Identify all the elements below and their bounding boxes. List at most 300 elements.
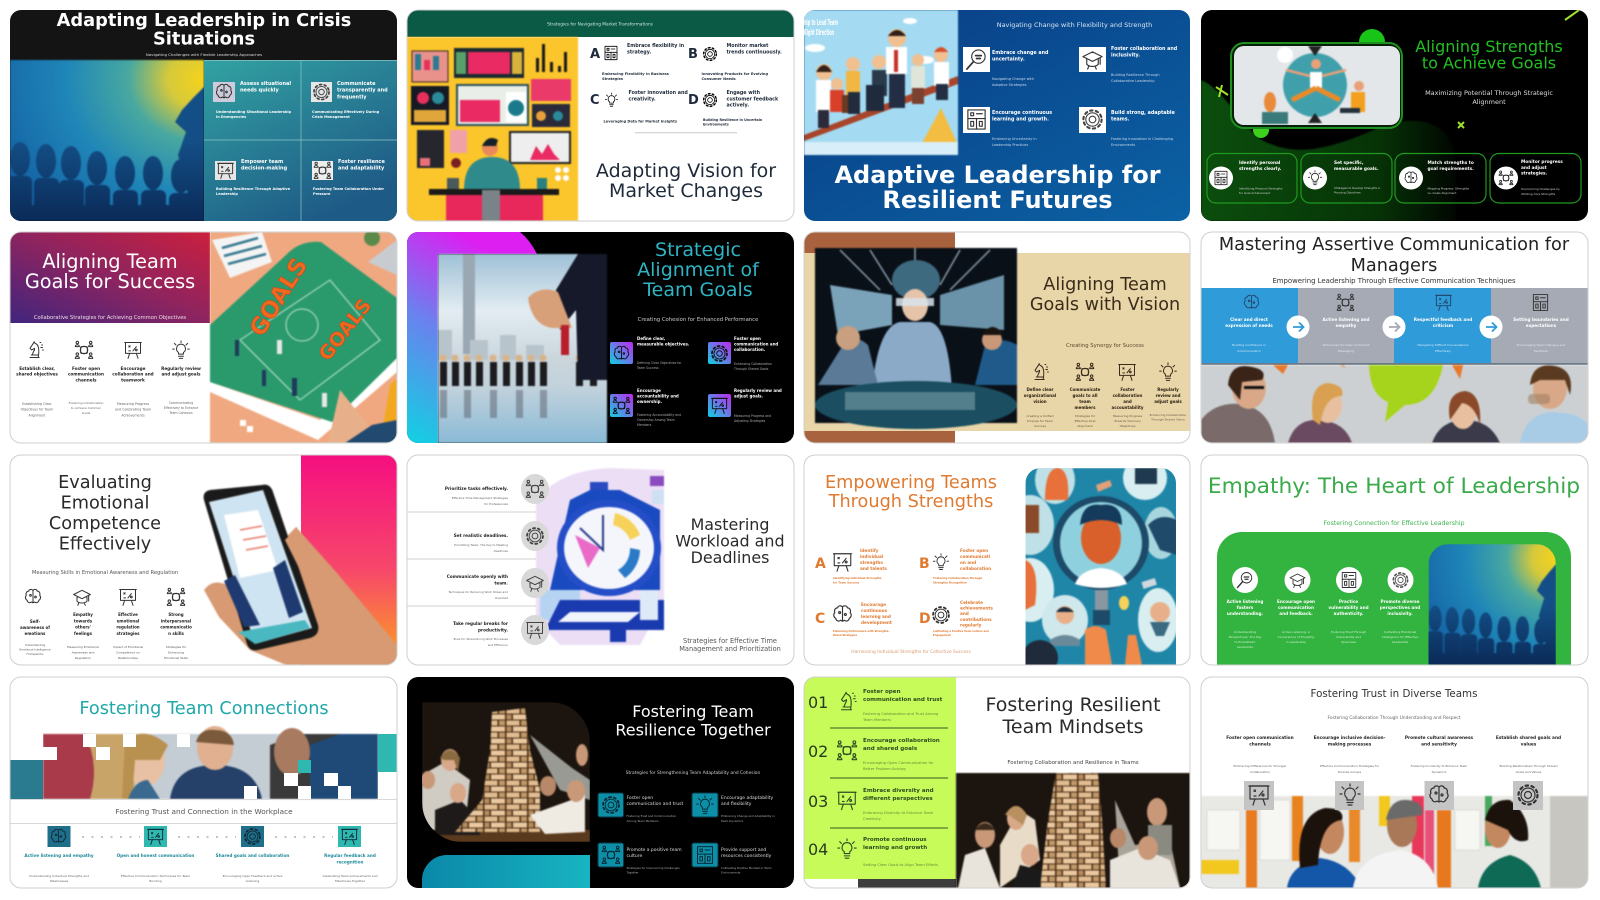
item: regulation: Impact of Emotional xyxy=(113,645,143,649)
item: review goals: Effectively to Enhance xyxy=(164,406,198,410)
item B: communicati xyxy=(960,554,991,559)
subtitle: Navigating Change with Flexibility and Strength xyxy=(997,21,1152,29)
title: Fostering Resilient xyxy=(985,694,1161,716)
row 4 xyxy=(452,615,549,647)
box: match strengths: Match strengths to xyxy=(1428,161,1474,166)
title: Adaptive Leadership for xyxy=(834,161,1161,189)
item: communicate: Alignment xyxy=(1077,424,1094,428)
item: vision: Creating a Unified xyxy=(1026,414,1054,418)
title: Emotional xyxy=(61,494,149,514)
column: cultural awareness xyxy=(1405,735,1474,774)
item: communicate: team xyxy=(1079,399,1091,404)
item: define objectives: Team Success xyxy=(636,366,659,370)
beige and brown backdrop xyxy=(804,232,1190,443)
item: collaboration: Achievements xyxy=(121,413,145,417)
step 01: Team Members xyxy=(862,718,891,722)
subtitle: Navigating Challenges with Flexible Leadership Approaches xyxy=(146,52,262,57)
title: Evaluating xyxy=(58,473,152,493)
item C: creativity. xyxy=(628,96,656,102)
item: active listening: understanding. xyxy=(1227,611,1263,616)
item: vulnerability: vulnerability and xyxy=(1328,605,1369,610)
item: accountability: Encourage xyxy=(637,388,661,393)
item: foster resilience: Pressure xyxy=(313,192,331,196)
item: embrace change: uncertainty. xyxy=(992,57,1025,63)
item: embrace change xyxy=(963,47,1049,87)
item: define objectives xyxy=(610,336,690,370)
item: clear objectives: shared objectives xyxy=(16,372,58,377)
item: empathy: Regulation xyxy=(75,656,91,660)
column: inclusive decisions: making processes xyxy=(1328,742,1372,748)
item: communication: Foster open xyxy=(72,366,100,371)
item: accountability: accountability and xyxy=(637,394,679,398)
item: empower team: decision-making xyxy=(241,166,288,172)
step 02: Encouraging Open Communication for xyxy=(863,761,934,765)
item: vision xyxy=(1024,364,1057,428)
dashboard illustration xyxy=(407,37,578,221)
segment: active listening: Messaging xyxy=(1338,349,1354,353)
footer caption: Harnessing Individual Strengths for Collective Success xyxy=(851,649,971,655)
gradient title panel xyxy=(10,232,210,323)
subtitle: Maximizing Potential Through Strategic xyxy=(1425,89,1553,97)
item A: strategy. xyxy=(627,49,651,55)
item B: Innovating Products for Evolving xyxy=(702,72,768,76)
item: empathy: Measuring Emotional xyxy=(67,645,99,649)
box: identify strengths: Identify personal xyxy=(1239,161,1280,166)
step 02: Encourage collaboration xyxy=(863,738,940,744)
item: define objectives: Define clear, xyxy=(637,336,665,341)
item: communicate: Communicating Effectively During xyxy=(312,110,379,114)
item: embrace change: Embrace change and xyxy=(992,51,1048,56)
item: open communication: communication xyxy=(1278,605,1314,610)
box: set goals: Strategies to Develop Strengths in xyxy=(1334,186,1380,190)
item D: regularly xyxy=(960,622,982,627)
step: shared goals: Listening xyxy=(246,879,259,883)
item: interpersonal: Enhancing xyxy=(168,650,184,654)
box: monitor progress: Monitor progress xyxy=(1521,160,1563,165)
subtitle: Management and Prioritization xyxy=(679,645,781,653)
photo strip with pixel squares xyxy=(10,726,397,799)
title: Empowering Teams xyxy=(825,473,997,493)
box: match strengths xyxy=(1395,154,1486,203)
box: identify strengths: Identifying Personal Strengths xyxy=(1239,186,1283,190)
item: communication: channels xyxy=(75,377,97,382)
card: Mastering Assertive Communication for Managers xyxy=(1201,232,1588,443)
gradient ribbon xyxy=(407,232,537,443)
box: monitor progress: Utilizing Core Strengths xyxy=(1521,192,1556,196)
item: open communication: communication and trust xyxy=(626,801,683,807)
title: Team Goals xyxy=(642,279,753,301)
photo: jenga tower xyxy=(421,702,590,842)
title: Managers xyxy=(1351,256,1437,276)
phone in hand xyxy=(204,485,397,665)
item: regulation xyxy=(113,590,143,660)
item: accountability: collaboration xyxy=(1113,393,1143,398)
step 01: Foster open xyxy=(863,689,901,695)
item D xyxy=(688,90,779,127)
item: review: Through Shared Vision xyxy=(1150,418,1185,422)
grey icon tiles xyxy=(1244,781,1543,810)
item: accountability: ownership. xyxy=(637,399,662,404)
item C: Encourage xyxy=(861,602,886,607)
item A: A xyxy=(590,47,600,62)
item: clear objectives: Objectives for Team xyxy=(21,408,53,412)
item: foster collaboration: Foster collaboration and xyxy=(1111,47,1177,52)
column: communication channels: channels xyxy=(1249,742,1271,748)
photo: jenga tower team xyxy=(956,773,1190,888)
item: regulation: emotional xyxy=(117,618,140,623)
segment: boundaries: expectations xyxy=(1526,323,1557,328)
subtitle: Fostering Trust and Connection in the Workplace xyxy=(115,807,293,816)
item: define objectives: measurable objectives. xyxy=(637,342,690,346)
item D: Building Resilience in Uncertain xyxy=(703,118,762,122)
illustration: magnifier and faces xyxy=(1006,456,1178,676)
card: Aligning Team Goals for Success xyxy=(10,230,397,443)
subtitle: Strategies for Effective Time xyxy=(683,637,777,645)
item: adaptable teams: Build strong, adaptable xyxy=(1111,111,1175,116)
accent marks xyxy=(1216,10,1579,128)
item: foster resilience xyxy=(312,159,386,196)
column: inclusive decisions xyxy=(1314,735,1386,774)
item: accountability: Towards Visionary xyxy=(1113,419,1141,423)
step 03: 03 xyxy=(808,792,828,811)
item D: D xyxy=(688,93,699,108)
item: embrace change: Adaptive Strategies xyxy=(992,83,1027,87)
item: adaptability: Encourage adaptability xyxy=(721,796,773,801)
title: Mastering Assertive Communication for xyxy=(1219,235,1569,255)
title: Fostering Team xyxy=(632,702,754,721)
silhouette image xyxy=(1427,544,1556,665)
arrow 1 xyxy=(1286,316,1310,338)
title: Goals with Vision xyxy=(1030,295,1180,315)
item D: Engagement xyxy=(933,633,952,637)
item: foster collaboration: inclusivity. xyxy=(1111,53,1140,59)
green panel xyxy=(1217,532,1571,665)
item: communicate: Strategies for xyxy=(1075,414,1095,418)
row 2: Deadlines xyxy=(494,549,508,553)
item: adaptability xyxy=(692,793,775,823)
item: diverse perspectives: inclusivity. xyxy=(1387,611,1413,616)
item: review goals xyxy=(161,341,201,415)
box: identify strengths: for Goal Achievement xyxy=(1239,191,1271,195)
item A: A xyxy=(815,556,826,572)
column: inclusive decisions: Encourage inclusive decision- xyxy=(1314,736,1385,741)
photo: hand placing red figure xyxy=(438,254,607,443)
item: continuous learning: Embracing Uncertainty in xyxy=(992,137,1037,141)
item: communication: to Achieve Common xyxy=(71,406,101,410)
title: Strategic xyxy=(655,239,741,261)
item: foster resilience: and adaptability xyxy=(338,166,385,172)
title: Adapting Vision for xyxy=(596,160,776,182)
item: vision: organizational xyxy=(1024,393,1057,398)
subtitle: Fostering Connection for Effective Leadership xyxy=(1323,520,1465,527)
item: diverse perspectives: perspectives and xyxy=(1380,605,1420,610)
subtitle: Alignment xyxy=(1472,98,1506,106)
item: review xyxy=(1150,363,1186,422)
card: Fostering Team Resilience Together xyxy=(407,677,794,888)
segment: active listening: empathy xyxy=(1336,323,1357,328)
item: accountability: Objectives xyxy=(1120,424,1136,428)
row 3: Techniques for Reducing Work Stress and xyxy=(448,590,508,594)
box: identify strengths: strengths clearly. xyxy=(1239,166,1282,172)
title: Aligning Strengths xyxy=(1415,37,1563,56)
item: vulnerability: authenticity. xyxy=(1334,611,1364,616)
item C: continuous xyxy=(861,608,888,613)
subtitle: Fostering Collaboration and Resilience in Teams xyxy=(1007,760,1139,766)
item: review: Enhancing Collaboration xyxy=(1150,413,1186,417)
item: interpersonal: n skills xyxy=(168,631,185,636)
item: empathy: towards xyxy=(74,618,93,623)
item: active listening: fosters xyxy=(1237,605,1254,610)
step 01 xyxy=(808,689,943,722)
item: communicate: Effective Goal xyxy=(1075,419,1096,423)
item: adaptable teams: Fostering Innovation in Challenging xyxy=(1111,137,1173,141)
item: clear objectives xyxy=(16,342,58,417)
segment: boundaries xyxy=(1513,295,1569,353)
item D: actively. xyxy=(726,103,749,109)
goals field illustration xyxy=(210,230,397,443)
item: accountability: Fostering Accountability and xyxy=(637,413,681,417)
item C: C xyxy=(815,611,825,627)
item: diverse perspectives xyxy=(1380,567,1420,644)
item: interpersonal: interpersonal xyxy=(161,618,192,623)
step: regular feedback xyxy=(322,826,378,883)
item: vulnerability xyxy=(1328,567,1369,644)
item: open communication: Enhancing Collaboration xyxy=(734,362,772,366)
item: open communication: collaboration. xyxy=(734,347,766,352)
row 4: Tools for Streamlining Work Processes xyxy=(453,637,508,641)
step: regular feedback: recognition xyxy=(337,859,364,864)
item: open communication: Fostering Trust and Communication xyxy=(626,814,676,818)
step: shared goals xyxy=(216,826,289,883)
title: Competence xyxy=(49,514,161,534)
step: honest communication: Effective Communication Techniques for Team xyxy=(121,874,190,878)
item: open communication: Encourage open xyxy=(1277,599,1315,604)
item: communicate: members xyxy=(1075,405,1096,410)
item: regulation: Relationships xyxy=(118,656,138,660)
item: communicate: Crisis Management xyxy=(312,115,350,119)
step: honest communication: Bonding xyxy=(149,879,162,883)
gradient title panel: Aligning Team xyxy=(42,250,178,273)
item B: Fostering Collaboration Through xyxy=(933,576,982,580)
item: positive culture xyxy=(598,843,682,874)
segment: clear expression: Clear and direct xyxy=(1230,317,1268,322)
subtitle: Measuring Skills in Emotional Awareness and Regulation xyxy=(32,570,178,576)
item: continuous learning: Encourage continuous xyxy=(992,111,1052,116)
item C: C xyxy=(590,93,600,108)
item: foster collaboration: Collaborative Leadership xyxy=(1111,79,1155,83)
segment: active listening: Techniques for Clear and Direct xyxy=(1322,343,1370,347)
item: open communication: Cornerstone of Empathy xyxy=(1278,635,1315,639)
item: communicate: frequently xyxy=(337,94,367,100)
box: set goals: Pursuing Objectives xyxy=(1334,190,1361,194)
item: accountability: and xyxy=(1123,399,1132,404)
item: communicate xyxy=(311,81,388,119)
box: set goals xyxy=(1301,154,1392,203)
item B: Consumer Needs xyxy=(702,77,736,81)
segment: active listening xyxy=(1321,294,1370,353)
step 04 xyxy=(808,837,938,867)
title: Aligning Team xyxy=(1043,275,1167,295)
segment: clear expression: Building Confidence in xyxy=(1232,343,1266,347)
item: accountability xyxy=(1112,364,1144,428)
box: identify strengths xyxy=(1207,154,1297,203)
step 03: Creativity xyxy=(863,817,882,821)
card: Empowering Teams Through Strengths xyxy=(804,455,1190,676)
item: continuous learning: Leadership Practices xyxy=(992,143,1028,147)
card: Aligning Team Goals with Vision xyxy=(804,232,1190,443)
item: open communication: Through Shared Goals xyxy=(733,367,769,371)
box: monitor progress xyxy=(1490,154,1581,203)
step: active listening xyxy=(24,826,94,883)
row 3 xyxy=(447,568,549,600)
item C: Based Strategies xyxy=(833,633,858,637)
column: cultural awareness: Dynamics xyxy=(1432,770,1447,774)
column: shared values xyxy=(1496,735,1561,774)
item: collaboration: teamwork xyxy=(121,377,145,382)
segment: feedback: Navigating Difficult Conversations xyxy=(1417,343,1469,347)
card: Aligning Strengths to Achieve Goals xyxy=(1201,10,1588,221)
item: active listening: Understanding xyxy=(1234,630,1256,634)
step 02: 02 xyxy=(808,742,828,761)
item: clear objectives: Establish clear, xyxy=(19,366,55,371)
row 1 xyxy=(445,474,549,506)
goals lettering: GOALS xyxy=(245,254,313,341)
item: self-awareness: Understanding xyxy=(25,643,45,647)
subtitle: Fostering Collaboration Through Understanding and Respect xyxy=(1328,715,1461,721)
title: Through Strengths xyxy=(828,492,993,512)
item: empathy: others' xyxy=(75,625,91,630)
item: communication: Fostering Collaboration xyxy=(69,401,103,405)
item: communicate: Communicate xyxy=(337,81,375,87)
header bar xyxy=(407,10,794,37)
title: Market Changes xyxy=(609,180,763,202)
item B xyxy=(919,548,991,584)
step: regular feedback: Regular feedback and xyxy=(324,853,376,858)
goals lettering: GOALS xyxy=(315,295,376,365)
item C: learning and xyxy=(861,614,891,619)
item: foster resilience: Foster resilience xyxy=(338,159,385,165)
column: communication channels: Collaboration xyxy=(1250,770,1270,774)
step: active listening: Understanding Individual Strengths and xyxy=(29,874,89,878)
item: adaptability: and flexibility xyxy=(721,801,752,807)
segment: boundaries: Setting boundaries and xyxy=(1513,317,1569,322)
item: vulnerability: Practice xyxy=(1339,599,1358,604)
item: collaboration: Measuring Progress xyxy=(117,402,149,406)
column: communication channels xyxy=(1226,735,1294,774)
column: communication channels: Foster open communication xyxy=(1226,736,1294,741)
item D: achievements xyxy=(960,606,993,611)
item: foster collaboration xyxy=(1079,46,1178,83)
segment: active listening: Active listening and xyxy=(1322,317,1370,322)
item: continuous learning: learning and growth. xyxy=(992,117,1049,123)
title: Mastering xyxy=(691,515,769,534)
subtitle: Creating Synergy for Success xyxy=(1066,343,1144,349)
crowd silhouette image xyxy=(7,60,204,221)
segment: clear expression: expression of needs xyxy=(1225,323,1273,328)
item: positive culture: Together xyxy=(626,870,640,874)
item: open communication xyxy=(708,336,778,371)
item B: on and xyxy=(960,560,976,565)
row 1: Effective Time Management Strategies xyxy=(452,496,508,500)
card: Evaluating Emotional Competence Effectively xyxy=(10,455,397,665)
item: continuous learning xyxy=(963,107,1052,147)
card: Adapting Leadership in Crisis Situations xyxy=(7,10,397,221)
item: self-awareness: Frameworks xyxy=(27,652,44,656)
item: vulnerability: Openness xyxy=(1341,640,1356,644)
item: diverse perspectives: Intelligence for Effective xyxy=(1382,635,1418,639)
step 03: different perspectives xyxy=(863,796,933,802)
item A xyxy=(590,43,685,81)
item: self-awareness xyxy=(19,589,51,656)
item: assess needs: needs quickly xyxy=(240,88,279,94)
card: Fostering Resilient Team Mindsets xyxy=(804,677,1190,888)
item: active listening: Leadership xyxy=(1237,645,1253,649)
segment bands xyxy=(1201,288,1588,365)
step 04: 04 xyxy=(808,840,828,859)
title: Resilient Futures xyxy=(882,186,1113,214)
step 01: communication and trust xyxy=(863,697,943,703)
column: shared values: Goals and Values xyxy=(1516,770,1542,774)
item: empower team: Leadership xyxy=(216,192,238,196)
box: monitor progress: and adjust xyxy=(1521,165,1547,171)
item: regulation: Effective xyxy=(118,612,138,617)
step 02: and shared goals xyxy=(863,746,918,752)
item C xyxy=(815,602,892,637)
item: collaboration: Encourage xyxy=(121,366,145,371)
item: empower team xyxy=(215,159,291,196)
step: active listening: Active listening and empathy xyxy=(24,853,94,858)
column: shared values: values xyxy=(1521,742,1537,748)
item: adaptability: Embracing Change and Adaptability in xyxy=(721,814,775,818)
item: open communication: in Leadership xyxy=(1286,640,1306,644)
right teal panel xyxy=(204,60,397,221)
item D: Engage with xyxy=(726,91,760,96)
segment: feedback: criticism xyxy=(1433,323,1454,328)
item D: and xyxy=(960,611,969,616)
item: accountability: accountability xyxy=(1112,405,1144,410)
item: open communication: and feedback. xyxy=(1279,611,1313,616)
title: Alignment of xyxy=(637,259,760,281)
item A: Identifying Individual Strengths xyxy=(833,576,881,580)
item A xyxy=(815,548,887,584)
step 03: Embrace diversity and xyxy=(863,788,934,794)
step: regular feedback: Celebrating Team Achievements and xyxy=(322,874,378,878)
item D: customer feedback xyxy=(726,96,779,102)
column: communication channels: Embracing Differences for Stronger xyxy=(1233,764,1287,768)
item: interpersonal: Strategies for xyxy=(166,645,186,649)
item: assess needs: in Emergencies xyxy=(216,115,246,119)
item: clear objectives: Alignment xyxy=(29,413,46,417)
item: positive culture: Promote a positive team xyxy=(626,848,682,853)
item: active listening: Perspectives: The Key xyxy=(1229,635,1262,639)
item: support xyxy=(692,843,772,874)
item: accountability xyxy=(610,388,681,427)
item: accountability: Foster xyxy=(1120,387,1135,392)
item C xyxy=(590,90,688,124)
segment: feedback xyxy=(1414,295,1472,353)
item A: Identify xyxy=(860,548,878,553)
item: interpersonal: Strong xyxy=(168,612,184,617)
item: communicate: Communicate xyxy=(1070,387,1100,392)
step: honest communication: Open and honest communication xyxy=(117,853,194,858)
stopwatch illustration xyxy=(536,468,664,645)
step: shared goals: Shared goals and collaboration xyxy=(216,853,289,858)
item D: Cultivating a Positive Team Culture and xyxy=(933,630,989,633)
item: active listening: to Empathetic xyxy=(1234,640,1256,644)
item: review goals: Communicating xyxy=(169,401,193,405)
photo: team at planning wall xyxy=(1201,796,1588,888)
item C: Enhancing Performance with Strengths- xyxy=(833,630,889,633)
